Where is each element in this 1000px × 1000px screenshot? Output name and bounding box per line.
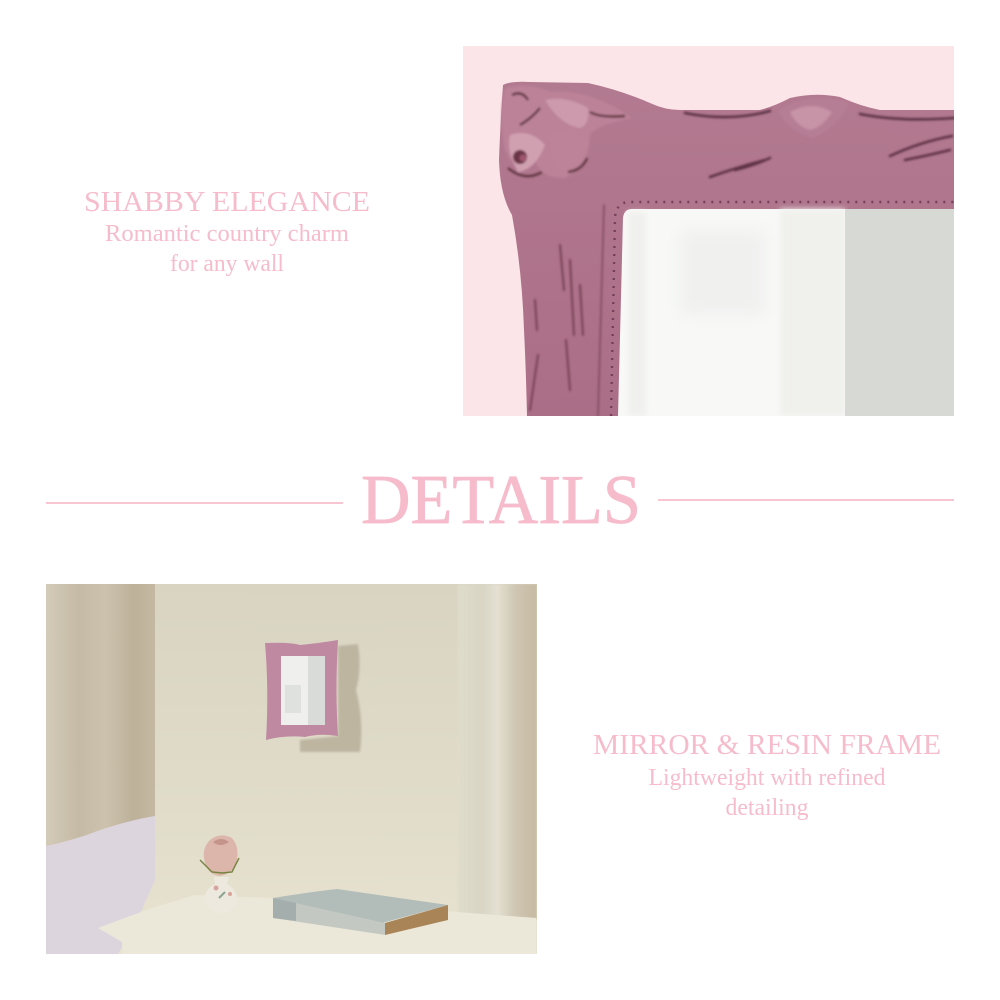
text: shabby elegance: Romantic country charm xyxy=(105,221,349,247)
photo: mirror frame close-up xyxy=(463,46,954,416)
top centre carving xyxy=(790,100,850,132)
text: shabby elegance: SHABBY ELEGANCE xyxy=(84,186,370,218)
text: mirror and resin frame: MIRROR & RESIN FRAME xyxy=(593,729,941,761)
text: shabby elegance: for any wall xyxy=(170,251,284,277)
title: details: DETAILS xyxy=(361,462,641,539)
text: mirror and resin frame: detailing xyxy=(726,795,808,821)
text: mirror and resin frame xyxy=(593,729,941,821)
text: shabby elegance xyxy=(84,186,370,277)
table xyxy=(98,895,536,954)
mini framed mirror xyxy=(265,640,338,740)
left curtain xyxy=(46,584,155,864)
text: mirror and resin frame: Lightweight with refined xyxy=(648,765,886,791)
blanket xyxy=(46,816,155,954)
mirror glass xyxy=(618,209,954,416)
distress marks xyxy=(530,111,954,416)
mirror frame xyxy=(499,82,954,416)
photo: mirror on wall with book and vase xyxy=(46,584,537,954)
bead trim xyxy=(611,202,954,416)
mirror shadow xyxy=(300,644,361,752)
book xyxy=(273,889,448,935)
right curtain xyxy=(458,584,537,919)
vase and rose xyxy=(200,835,240,899)
corner carving xyxy=(502,86,632,178)
